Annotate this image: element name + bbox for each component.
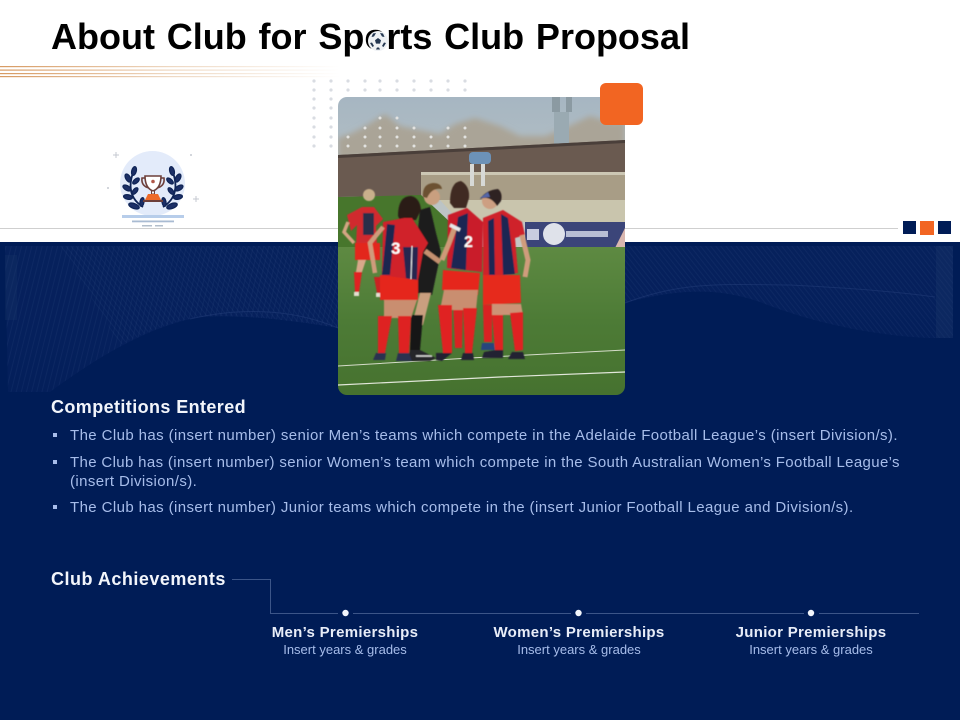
player at right of huddle [480,189,528,359]
milestone: junior premierships: Insert years & grades [749,642,873,657]
orange accent square [600,83,643,125]
bullet list: competitions: (insert Division/s). [70,473,197,490]
player number 3: 3 [391,239,400,258]
player 15 in background [344,189,383,297]
player number 2: 2 [464,234,473,251]
navy background panel [0,242,960,720]
title: About Club for Sports Club Proposal [51,16,690,57]
milestone: women's premierships: Insert years & grades [517,642,641,657]
icon: football in title [368,31,388,51]
three small square accents [903,221,951,235]
photo: women's football team huddle [338,97,625,395]
bullet list: competitions: The Club has (insert number) senior Men’s teams which compete in the Adelaide Football League’s (insert Division/s). [70,427,898,444]
milestone: junior premierships [736,624,886,657]
bullet list: competitions [53,427,900,516]
bullet list: competitions: The Club has (insert number) senior Women’s team which compete in the South Australian Women’s Football League’s [70,454,900,471]
bullet list: competitions: The Club has (insert number) Junior teams which compete in the (insert Junior Football League and Division/s). [70,499,854,516]
player number 2 [436,181,495,361]
milestone: men's premierships: Men’s Premierships [272,624,418,641]
heading: competitions entered: Competitions Entered [51,397,246,417]
milestone: women's premierships: Women’s Premierships [493,624,665,641]
milestone: men's premierships: Insert years & grades [283,642,407,657]
milestone: women's premierships [493,624,665,657]
milestone: men's premierships [272,624,418,657]
goalkeeper in black [408,183,442,361]
player number 3 [370,196,440,361]
heading: club achievements: Club Achievements [51,569,226,589]
milestone: junior premierships: Junior Premierships [736,624,886,641]
